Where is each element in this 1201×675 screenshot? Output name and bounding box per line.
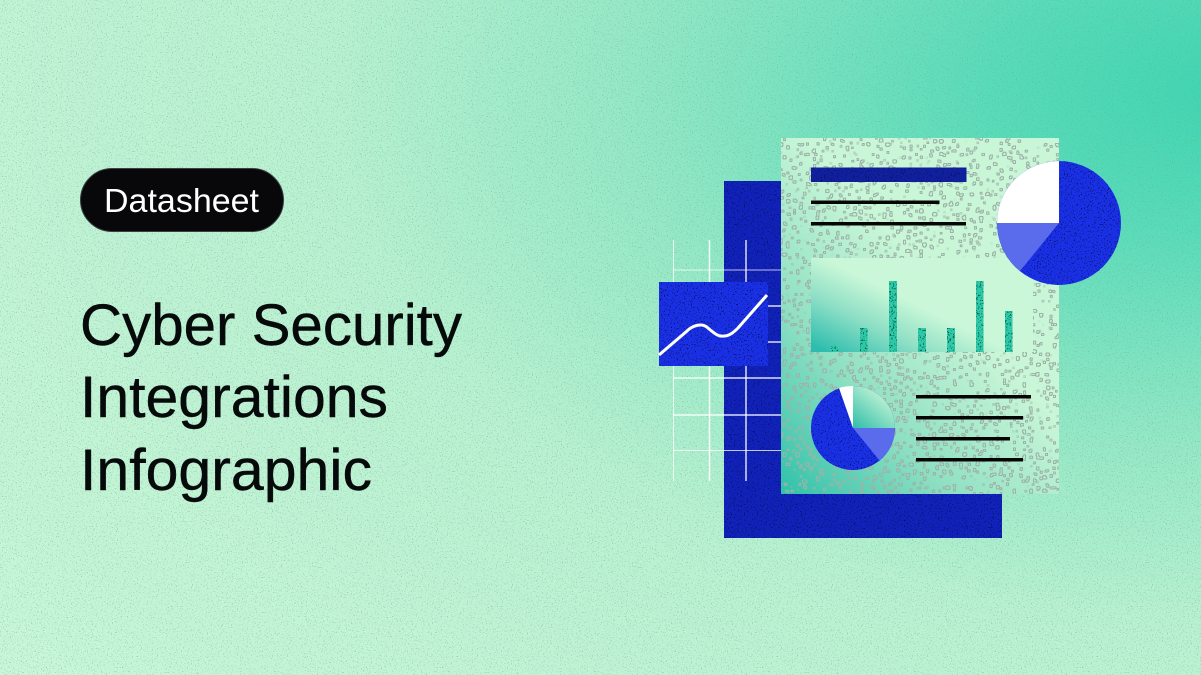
grid lines [673,240,781,481]
title: Integrations [80,365,388,430]
title [80,293,462,503]
badge: Datasheet [80,168,284,232]
bar chart panel [811,258,1033,352]
small pie chart [811,386,895,470]
line chart card [659,282,768,366]
text lines bottom [916,395,1031,462]
badge: Datasheet: Datasheet [104,182,259,219]
text lines top [811,200,966,226]
title: Cyber Security [80,293,462,358]
document page with speckle [781,138,1059,494]
title: Infographic [80,438,372,503]
illustration: report document [659,138,1121,538]
text heading bar [811,168,966,182]
large pie chart [997,161,1121,285]
blue L-shaped backing [724,181,1002,538]
